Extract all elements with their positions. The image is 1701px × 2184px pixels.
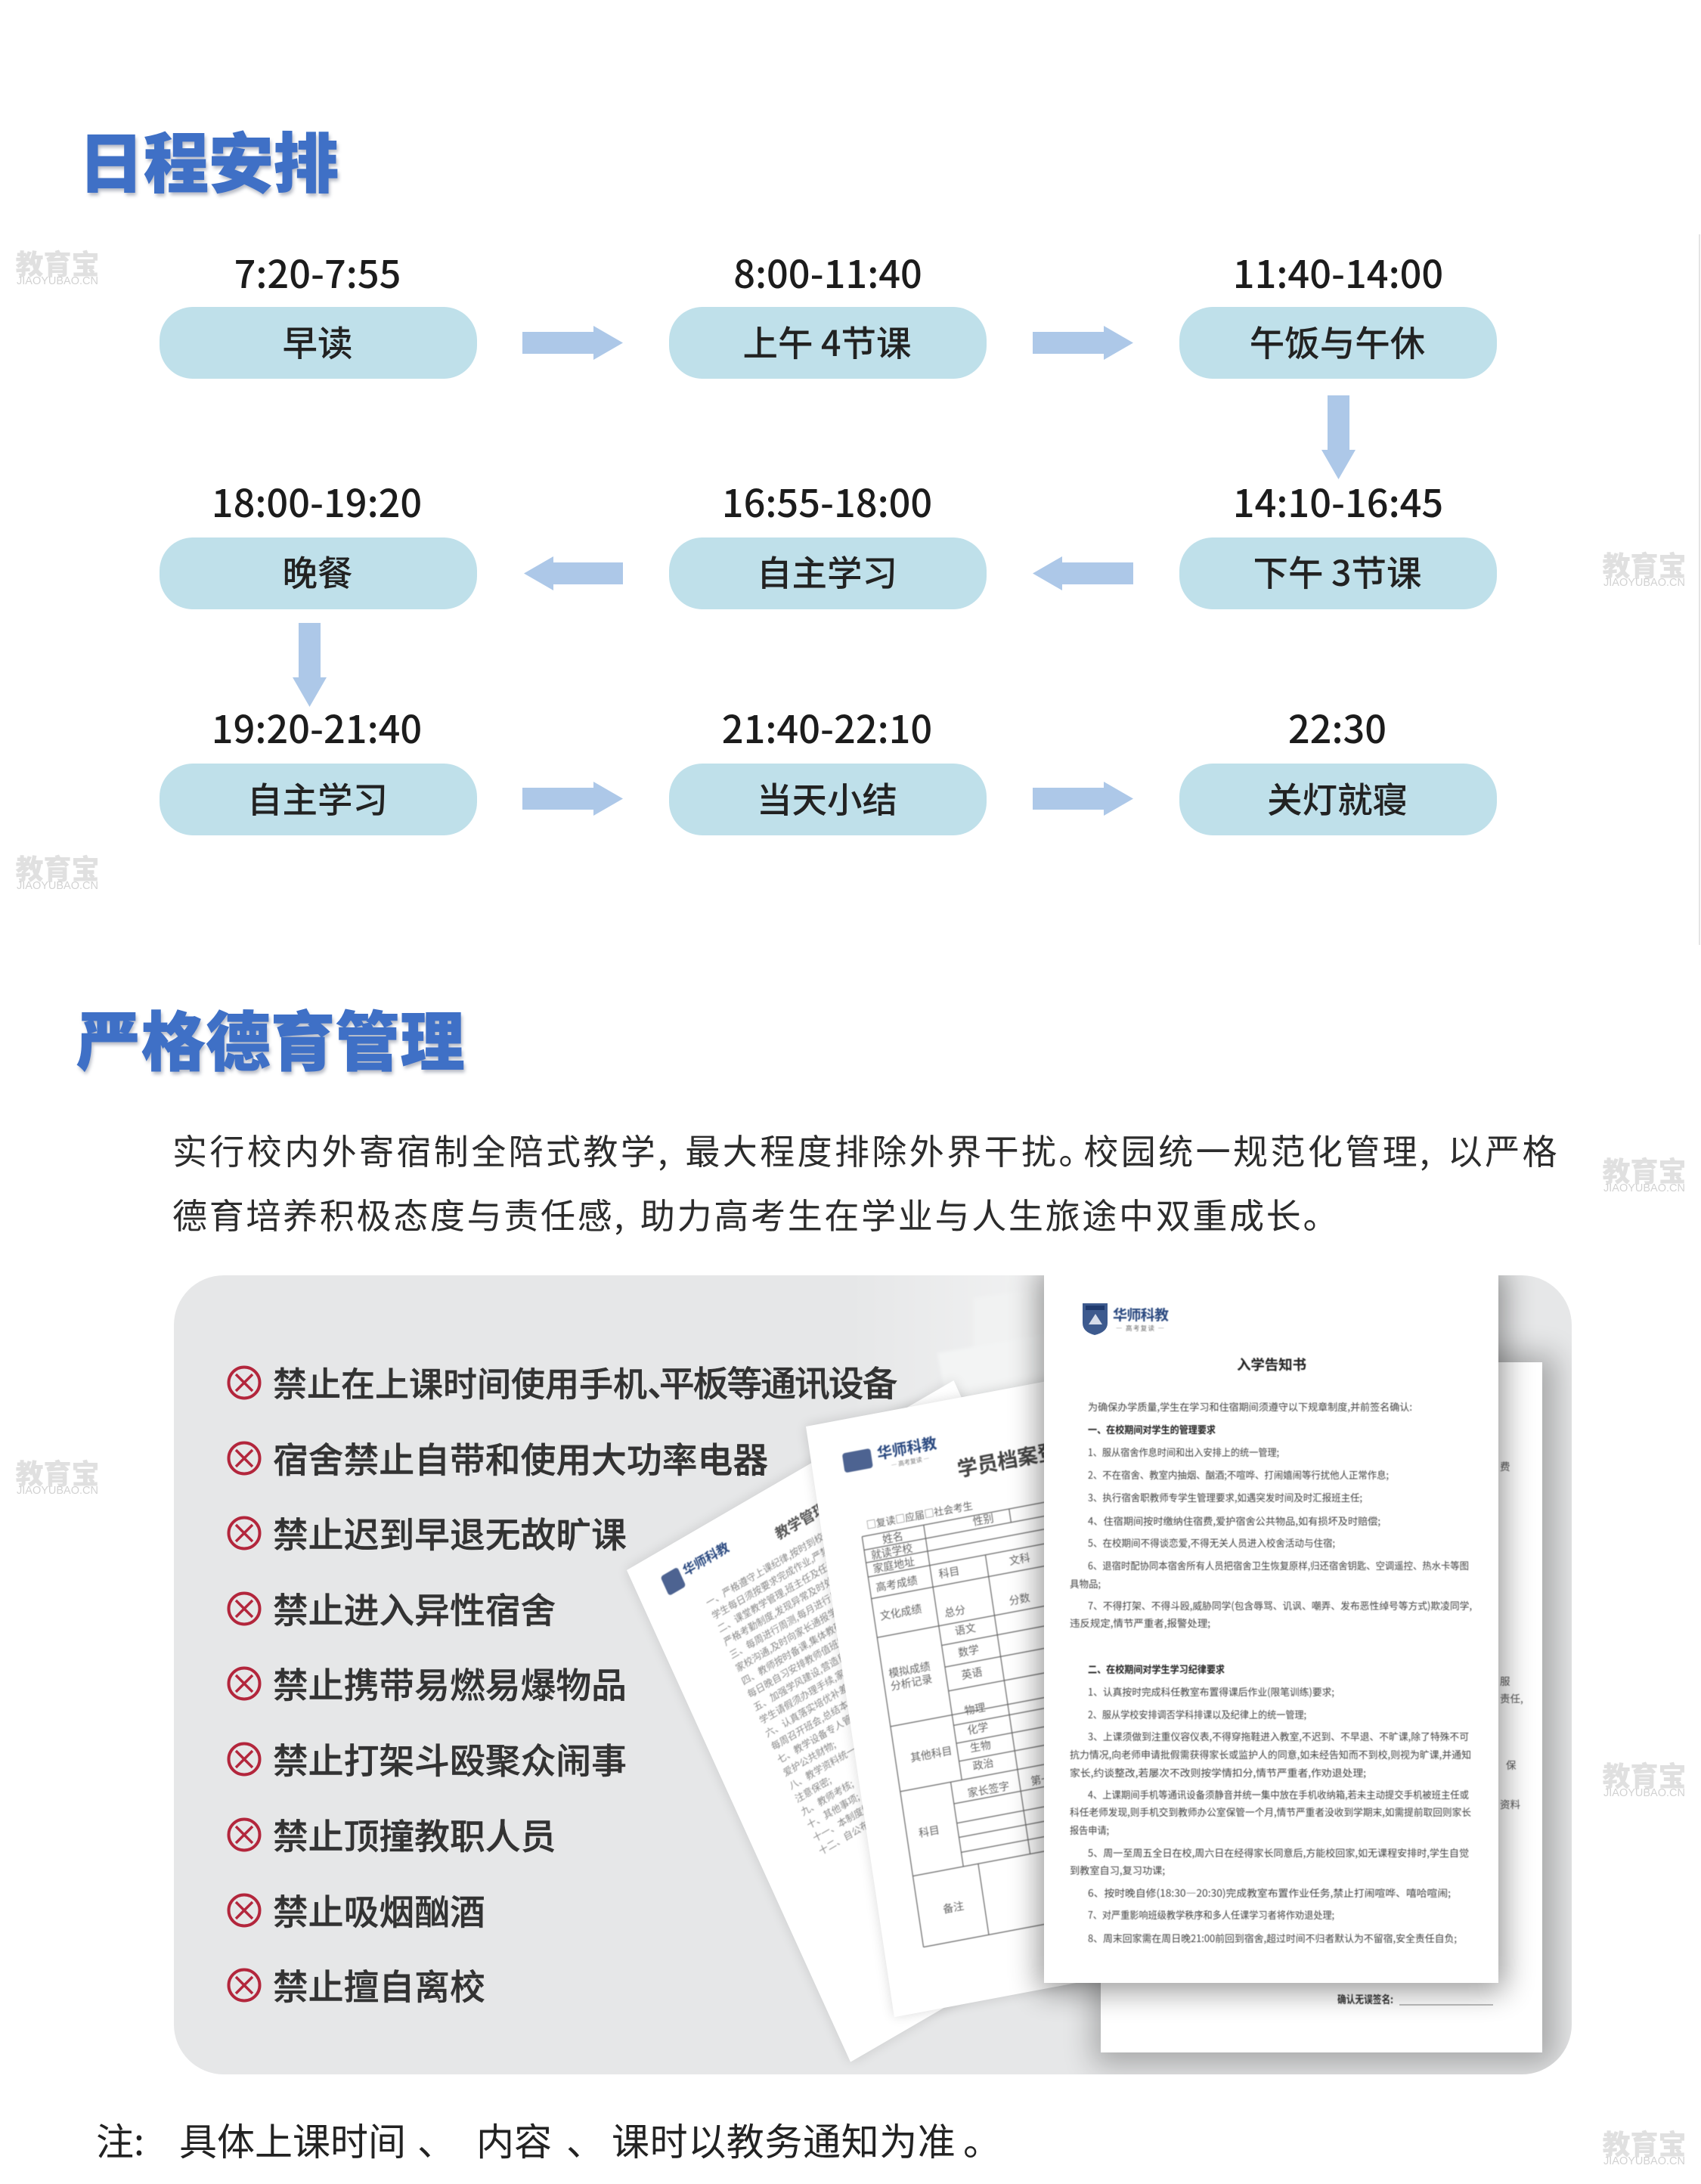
time label: 19:20-21:40: 19:20-21:40 — [212, 699, 422, 754]
arrow: down left column — [293, 623, 327, 707]
right edge rule — [1699, 234, 1700, 945]
arrow: row 2 left — [524, 556, 623, 590]
pill: morning reading — [160, 307, 477, 379]
rule 2: 宿舍禁止自带和使用大功率电器 — [273, 1433, 768, 1483]
title: moral management: 严格德育管理 — [76, 991, 465, 1084]
document: left rotated sheet: 教学管理制度 — [772, 1482, 854, 1544]
document: front enrollment notice: 2、服从学校安排调否学科排课以及纪律上的统一管理; — [1088, 1707, 1306, 1721]
document: middle rotated sheet with table: — 高考复读 — — [891, 1454, 930, 1470]
rule 5: 禁止携带易燃易爆物品 — [273, 1658, 627, 1708]
document: middle rotated sheet with table: 家长签字 — [967, 1778, 1010, 1801]
document: front enrollment notice: 6、退宿时配协同本宿舍所有人员把宿舍卫生恢复原样,归还宿舍钥匙、空调遥控、热水卡等图 — [1088, 1558, 1469, 1572]
icon: school shield logo — [1083, 1303, 1108, 1335]
document: front enrollment notice: 1、认真按时完成科任教室布置得课后作业(限笔训练)要求; — [1088, 1684, 1334, 1699]
document: middle rotated sheet with table: 就读学校 — [870, 1541, 914, 1563]
panel: documents illustration — [626, 1275, 1572, 2074]
document: left rotated sheet: 十、其他事项; — [804, 1789, 861, 1832]
time label: 21:40-22:10: 21:40-22:10 — [722, 699, 932, 754]
document: front enrollment notice — [1039, 1269, 1504, 1991]
watermark right 2: JIAOYUBAO.CN — [1603, 1182, 1685, 1194]
pill: lights out — [1179, 764, 1497, 835]
document: left rotated sheet: 五、加强学风建设,营造良好学习氛围; — [751, 1623, 892, 1714]
document: middle rotated sheet with table: 科目 — [918, 1822, 940, 1841]
watermark right 4: JIAOYUBAO.CN — [1603, 2155, 1685, 2167]
document: middle rotated sheet with table: 政治 — [971, 1755, 995, 1774]
watermark left 1: JIAOYUBAO.CN — [17, 275, 98, 287]
watermark right 3: JIAOYUBAO.CN — [1603, 1787, 1685, 1799]
schedule arrows — [293, 326, 1356, 816]
document: front enrollment notice: 8、周末回家需在周日晚21:00前回到宿舍,超过时间不归者默认为不留宿,安全责任自负; — [1088, 1931, 1457, 1945]
document: middle rotated sheet with table: 家庭地址 — [872, 1554, 916, 1577]
title: schedule: 日程安排 — [79, 111, 339, 206]
document: front enrollment notice: 违反规定,情节严重者,报警处理; — [1070, 1616, 1210, 1630]
time label: 18:00-19:20: 18:00-19:20 — [212, 472, 422, 528]
document: front enrollment notice: 具物品; — [1070, 1576, 1101, 1591]
footnote: 、 — [417, 2112, 455, 2167]
document: front enrollment notice: 6、按时晚自修(18:30—20:30)完成教室布置作业任务,禁止打闹喧哗、嘻哈喧闹; — [1088, 1885, 1451, 1900]
rule 1: 禁止在上课时间使用手机、平板等通讯设备 — [273, 1356, 896, 1407]
document: front enrollment notice: 5、在校期间不得谈恋爱,不得无关人员进入校舍活动与住宿; — [1088, 1535, 1335, 1550]
time label: 11:40-14:00: 11:40-14:00 — [1233, 243, 1443, 299]
pill: lights out: 关灯就寝 — [1267, 773, 1408, 823]
document: middle rotated sheet with table: 其他科目 — [909, 1743, 953, 1766]
document: left rotated sheet: 九、教师考核; — [798, 1777, 856, 1818]
document: middle rotated sheet with table: 化学 — [966, 1719, 990, 1738]
document: middle rotated sheet with table: 数学 — [957, 1642, 980, 1661]
pill: evening self study — [160, 764, 477, 835]
document: middle rotated sheet with table: 姓名 — [881, 1529, 904, 1547]
document: left rotated sheet: 注意保密; — [792, 1773, 833, 1805]
arrow: row 1 second — [1033, 326, 1133, 360]
document: back right sheet: 服 — [1500, 1673, 1510, 1688]
arrow: row 3 first — [522, 782, 623, 816]
document: front enrollment notice: 到教室自习,复习功课; — [1070, 1863, 1165, 1877]
document: front enrollment notice: 二、在校期间对学生学习纪律要求 — [1088, 1662, 1225, 1676]
document: middle rotated sheet with table: 第一阶段 — [1030, 1766, 1074, 1789]
watermark left 3: 教育宝 — [15, 1451, 100, 1492]
panel: grey background — [174, 1275, 1572, 2074]
pill: lunch and nap: 午饭与午休 — [1250, 316, 1425, 367]
document: left rotated sheet: 二、课堂教学管理,班主任及任课教师共同负责,加强学生管理; — [715, 1496, 940, 1635]
watermark left 2: 教育宝 — [15, 847, 100, 888]
document: middle rotated sheet with table: □复读□应届□社会考生 — [866, 1498, 974, 1532]
document: middle rotated sheet with table: 分数 — [1008, 1590, 1031, 1609]
document: front enrollment notice: 报告申请; — [1070, 1823, 1109, 1837]
footnote: 。 — [963, 2112, 1001, 2167]
paragraph line 2: 德育培养积极态度与责任感,助力高考生在学业与人生旅途中双重成长。 — [172, 1189, 1340, 1239]
footnote: 内容 — [476, 2112, 552, 2167]
rule 8: 禁止吸烟酗酒 — [273, 1885, 485, 1935]
document: front enrollment notice: 入学告知书 — [1237, 1355, 1306, 1374]
pill: lunch and nap — [1179, 307, 1497, 379]
pill: morning classes — [669, 307, 987, 379]
document: middle rotated sheet with table: 第二阶段 — [1092, 1755, 1136, 1777]
document: front enrollment notice: 家长,约谈整改,若屡次不改则按学情扣分,情节严重者,作劝退处理; — [1070, 1765, 1366, 1780]
arrow: row 2 right — [1033, 556, 1133, 590]
paragraph line 1: 实行校内外寄宿制全陪式教学,最大程度排除外界干扰。校园统一规范化管理,以严格 — [172, 1125, 1560, 1175]
footnote: 、 — [566, 2112, 604, 2167]
document: front enrollment notice: 华师科教 — [1113, 1304, 1169, 1324]
rule 9: 禁止擅自离校 — [273, 1959, 485, 2010]
document: left rotated sheet: 三、每周进行周测,每月进行月考,及时反馈成绩与学情分析; — [727, 1527, 943, 1662]
time label: 7:20-7:55: 7:20-7:55 — [234, 243, 401, 299]
document: front enrollment notice: — 高考复读 — — [1116, 1324, 1164, 1333]
pill: morning classes: 上午 4节课 — [743, 316, 911, 367]
document: left rotated sheet: 十二、自公布之日起施行; — [816, 1792, 914, 1857]
watermark right 1: JIAOYUBAO.CN — [1603, 577, 1685, 589]
footnote: 注: — [96, 2112, 144, 2167]
document: middle rotated sheet with table: 语文 — [954, 1620, 977, 1639]
document: middle rotated sheet with table: 物理 — [963, 1699, 987, 1718]
document: back right sheet: 保 — [1506, 1757, 1517, 1772]
document: middle rotated sheet with table: 科目 — [937, 1563, 961, 1582]
document: front enrollment notice: 抗力情况,向老师申请批假需获得家长或监护人的同意,如未经告知而不到校,则视为旷课,并通知 — [1070, 1747, 1471, 1761]
arrow: row 1 first — [522, 326, 623, 360]
document: middle rotated sheet with table: 备注 — [942, 1898, 965, 1917]
document: back right sheet: 确认无误签名: — [1337, 1992, 1393, 2007]
pill: afternoon classes — [1179, 537, 1497, 609]
arrow: row 3 second — [1033, 782, 1133, 816]
document: front enrollment notice: 1、服从宿舍作息时间和出入安排上的统一管理; — [1088, 1445, 1279, 1459]
time label: 14:10-16:45: 14:10-16:45 — [1233, 472, 1443, 528]
faint sheets behind — [847, 1275, 1047, 1427]
document: back right sheet: 资料 — [1500, 1796, 1521, 1811]
document: front enrollment notice: 4、住宿期间按时缴纳住宿费,爱护宿舍公共物品,如有损坏及时赔偿; — [1088, 1513, 1380, 1528]
document: left rotated sheet: 每日晚自习安排教师值班答疑,保障学习效率; — [745, 1596, 910, 1701]
document: front enrollment notice: 7、不得打架、不得斗殴,威胁同学(包含辱骂、讥讽、嘲弄、发布恶性绰号等方式)欺凌同学, — [1088, 1598, 1472, 1612]
document: middle rotated sheet with table: 生物 — [969, 1737, 992, 1756]
document: front enrollment notice: 3、执行宿舍职教师专学生管理要求,如遇突发时间及时汇报班主任; — [1088, 1490, 1362, 1504]
watermark left 3: JIAOYUBAO.CN — [17, 1485, 98, 1497]
footnote — [96, 2112, 1001, 2167]
pill: afternoon classes: 下午 3节课 — [1253, 546, 1421, 596]
watermark right 2: 教育宝 — [1603, 1149, 1686, 1190]
document: left rotated sheet: 每周召开班会,总结本周学习生活情况; — [769, 1662, 909, 1753]
document: front enrollment notice: 4、上课期间手机等通讯设备须静音并统一集中放在手机收纳箱,若未主动提交手机被班主任或 — [1088, 1787, 1469, 1801]
document: middle rotated sheet with table: 文科 — [1008, 1550, 1031, 1569]
document: back right sheet: 费 — [1500, 1458, 1510, 1473]
document: middle rotated sheet with table: 英语 — [960, 1664, 984, 1683]
document: left rotated sheet: 学生每日须按要求完成作业,严禁抄袭他人作业;教师按时批改; — [709, 1483, 934, 1622]
pill: self study: 自主学习 — [757, 546, 897, 596]
pill: daily summary: 当天小结 — [757, 773, 897, 823]
watermark right 1: 教育宝 — [1603, 544, 1686, 584]
document: back right sheet: 责任, — [1500, 1690, 1523, 1705]
document: left rotated sheet: 华师科教 — [680, 1536, 732, 1579]
document: left rotated sheet: 爱护公共财物; — [781, 1737, 838, 1780]
document: left rotated sheet: 四、教师按时备课,集体教研,统一教学进度; — [739, 1586, 898, 1688]
document: middle rotated sheet with table — [803, 1379, 1086, 2019]
document: left rotated sheet: 七、教学设备专人管理; — [775, 1705, 864, 1766]
watermark left 1: 教育宝 — [15, 242, 100, 283]
document: left rotated sheet: 学生请假须办理手续,家长确认; — [757, 1650, 873, 1727]
document: left rotated sheet: 六、认真落实培优补差计划; — [763, 1669, 869, 1740]
rule 3: 禁止迟到早退无故旷课 — [273, 1507, 627, 1558]
document: front enrollment notice: 3、上课须做到注重仪容仪表,不得穿拖鞋进入教室,不迟到、不早退、不旷课,除了特殊不可 — [1088, 1729, 1469, 1743]
document: left rotated sheet — [626, 1380, 965, 2062]
rule 7: 禁止顶撞教职人员 — [273, 1809, 556, 1860]
document: left rotated sheet: 八、教学资料统一发放; — [787, 1731, 876, 1792]
watermark left 2: JIAOYUBAO.CN — [17, 880, 98, 892]
rule 4: 禁止进入异性宿舍 — [273, 1583, 556, 1634]
pill: evening self study: 自主学习 — [247, 773, 388, 823]
document: left rotated sheet: 十一、本制度解释权归学校; — [810, 1774, 916, 1845]
document: front enrollment notice: 科任老师发现,则手机交到教师办公室保管一个月,情节严重者没收到学期末,如需提前取回则家长 — [1070, 1805, 1471, 1819]
document: front enrollment notice: 5、周一至周五全日在校,周六日在经得家长同意后,方能校回家,如无课程安排时,学生自觉 — [1088, 1845, 1469, 1860]
time label: 22:30: 22:30 — [1288, 699, 1387, 754]
document: left rotated sheet: 一、严格遵守上课纪律,按时到校上课,不迟到不早退;认真听讲, — [703, 1469, 931, 1609]
document: front enrollment notice: 7、对严重影响班级教学秩序和多人任课学习者将作劝退处理; — [1088, 1907, 1334, 1922]
footnote: 具体上课时间 — [179, 2112, 406, 2167]
document: middle rotated sheet with table: 性别 — [971, 1510, 995, 1529]
footnote: 课时以教务通知为准 — [612, 2112, 956, 2167]
document: middle rotated sheet with table: 学员档案登记表 — [955, 1427, 1100, 1483]
document: middle rotated sheet with table: 华师科教 — [875, 1431, 938, 1464]
document: left rotated sheet: 严格考勤制度,发现异常及时处理,做好每日记录汇报; — [721, 1528, 913, 1649]
document: front enrollment notice: 为确保办学质量,学生在学习和住宿期间须遵守以下规章制度,并前签名确认: — [1088, 1399, 1412, 1414]
watermark right 3: 教育宝 — [1603, 1754, 1686, 1795]
document: front enrollment notice: 2、不在宿舍、教室内抽烟、酗酒;不喧哗、打闹嬉闹等行扰他人正常作息; — [1088, 1467, 1389, 1482]
document: middle rotated sheet with table: 总分 — [943, 1602, 966, 1621]
document: front enrollment notice: 一、在校期间对学生的管理要求 — [1088, 1422, 1216, 1436]
watermark right 4: 教育宝 — [1603, 2122, 1686, 2163]
document: middle rotated sheet with table: 分析记录 — [890, 1671, 933, 1694]
document: middle rotated sheet with table: 文化成绩 — [879, 1601, 923, 1624]
document: left rotated sheet: 家校沟通,及时向家长通报学生情况; — [733, 1588, 866, 1674]
time label: 8:00-11:40: 8:00-11:40 — [733, 243, 922, 299]
pill: dinner — [160, 537, 477, 609]
pill: dinner: 晚餐 — [283, 546, 352, 596]
pill: morning reading: 早读 — [283, 316, 352, 367]
document: middle rotated sheet with table: 高考成绩 — [875, 1572, 919, 1595]
pill: self study — [669, 537, 987, 609]
rule 6: 禁止打架斗殴聚众闹事 — [273, 1733, 627, 1784]
time label: 16:55-18:00: 16:55-18:00 — [722, 472, 932, 528]
document: middle rotated sheet with table: 提分目标 — [1058, 1576, 1102, 1599]
document: middle rotated sheet with table: 模拟成绩 — [888, 1659, 931, 1681]
document: back right sheet — [1093, 1355, 1556, 2065]
pill: daily summary — [669, 764, 987, 835]
arrow: down right column — [1321, 395, 1356, 479]
